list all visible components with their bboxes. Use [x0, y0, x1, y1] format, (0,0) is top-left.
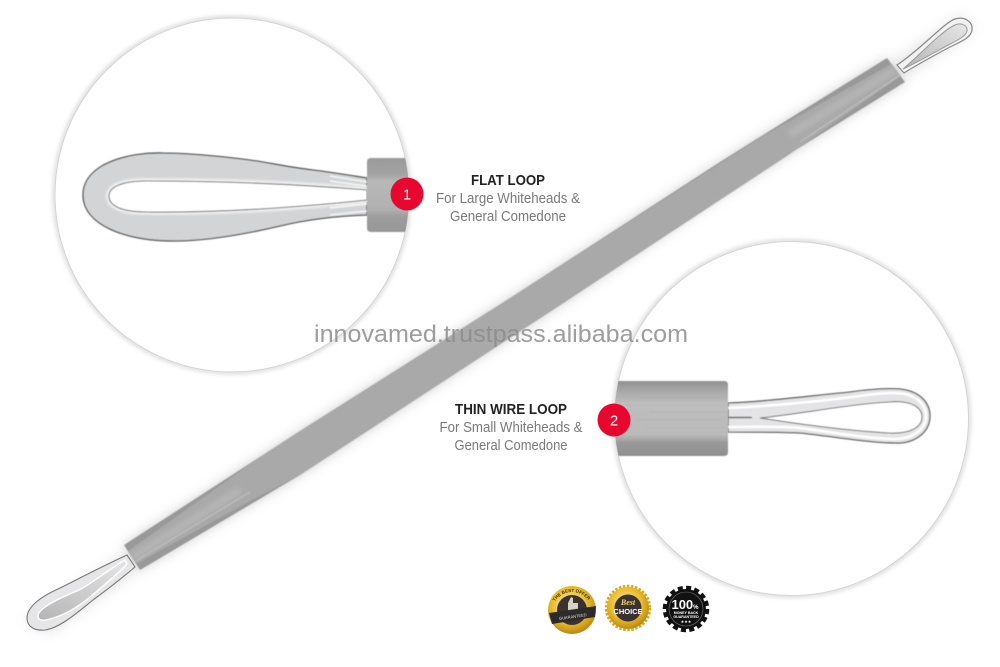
thin wire loop enlarged: [728, 389, 930, 443]
text block: thin wire loop: General Comedone: [454, 438, 568, 454]
text block: flat loop: [436, 172, 580, 225]
text block: thin wire loop: [440, 401, 583, 454]
upper right thin loop tip: [897, 18, 972, 73]
icon: best choice seal: Best: [620, 598, 636, 607]
text block: flat loop: FLAT LOOP: [471, 172, 545, 189]
text block: thin wire loop: For Small Whiteheads &: [440, 420, 583, 436]
badge: number 1: [390, 178, 424, 210]
icon: 100% money back seal: ★★★: [681, 619, 692, 624]
text block: thin wire loop: THIN WIRE LOOP: [455, 401, 567, 418]
lower left flat loop tip: [27, 555, 135, 630]
flat loop enlarged: [83, 153, 367, 241]
icon: best choice seal: CHOICE: [613, 607, 643, 616]
icon: 100% money back seal: GUARANTEED: [673, 615, 699, 619]
text block: flat loop: For Large Whiteheads &: [436, 191, 580, 207]
badge: number 2: 2: [610, 412, 618, 430]
thin wire ferrule: [600, 381, 728, 456]
shaft body: [124, 58, 905, 570]
panel: flat loop magnifier: [54, 18, 415, 372]
icon: 100% money back seal: MONEY BACK: [674, 611, 699, 615]
panel: thin wire loop magnifier: [600, 241, 969, 596]
badge: number 1: 1: [403, 186, 411, 204]
icon: best choice seal: [606, 586, 650, 630]
icon: best offer guaranteed seal: [548, 586, 596, 634]
watermark: innovamed.trustpass.alibaba.com: [314, 321, 688, 348]
icon: best offer guaranteed seal: GUARANTEED: [559, 612, 587, 621]
icon: best offer guaranteed seal: THE BEST OFFER: [552, 588, 590, 601]
icon: 100% money back seal: 100%: [671, 597, 699, 612]
icon: 100% money back seal: [665, 588, 707, 630]
text block: flat loop: General Comedone: [450, 209, 566, 225]
badge: number 2: [598, 404, 630, 436]
flat loop ferrule: [366, 158, 408, 232]
